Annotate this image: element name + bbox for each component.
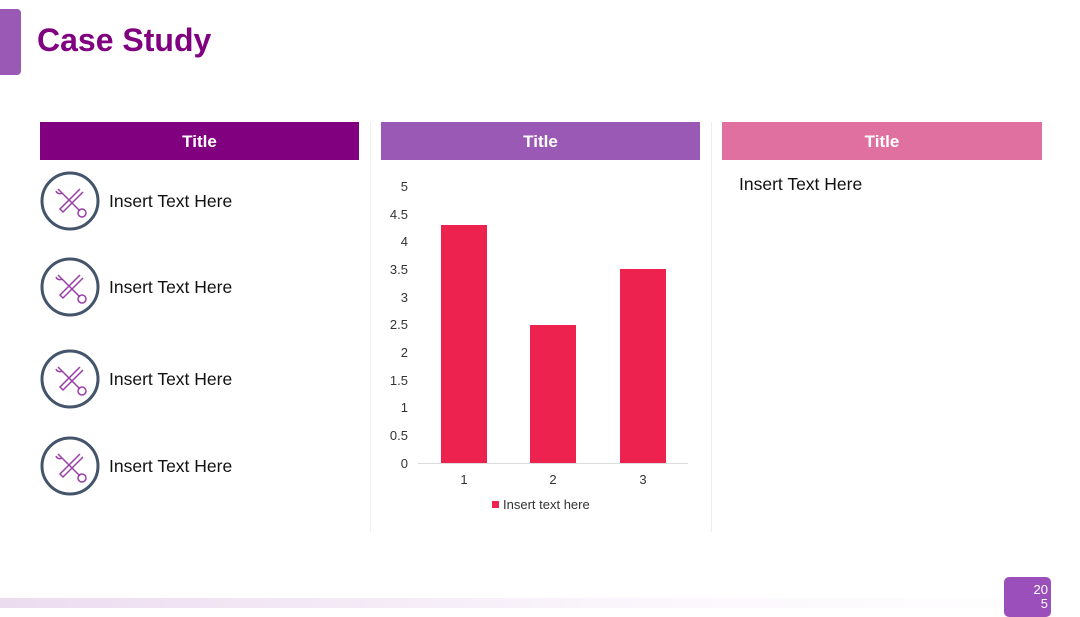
bar chart: 3 bbox=[639, 472, 647, 487]
bar chart: 4.5 bbox=[390, 207, 408, 222]
header: left bbox=[40, 122, 359, 160]
bar chart: 1 bbox=[401, 400, 408, 415]
bar chart: 5 bbox=[401, 179, 408, 194]
bar chart: 3.5 bbox=[390, 262, 408, 277]
header: left: Title bbox=[182, 132, 217, 151]
bar chart: 1 bbox=[460, 472, 468, 487]
list item 1 bbox=[40, 172, 232, 230]
page number bbox=[1004, 577, 1051, 617]
list item 4: Insert Text Here bbox=[109, 456, 232, 476]
header: middle bbox=[381, 122, 700, 160]
icon: tools bbox=[40, 436, 100, 496]
list item 3 bbox=[40, 350, 232, 408]
footer gradient bbox=[0, 598, 1080, 608]
bar chart: 4 bbox=[401, 234, 408, 249]
icon: tools bbox=[40, 258, 100, 316]
list item 2 bbox=[40, 258, 232, 316]
list item 3: Insert Text Here bbox=[109, 369, 232, 389]
list item 2: Insert Text Here bbox=[109, 277, 232, 297]
bar chart: 0.5 bbox=[390, 428, 408, 443]
page number: 5 bbox=[1041, 596, 1048, 611]
bar chart: 3 bbox=[401, 290, 408, 305]
header: right bbox=[722, 122, 1042, 160]
column dividers bbox=[370, 122, 371, 532]
list item 4 bbox=[40, 436, 232, 496]
bar chart: 2 bbox=[401, 345, 408, 360]
legend: Insert text here bbox=[503, 497, 590, 512]
right text block: Insert Text Here bbox=[739, 174, 862, 194]
bar chart: 0 bbox=[401, 456, 408, 471]
header: right: Title bbox=[865, 132, 899, 151]
bar chart: 1.5 bbox=[390, 373, 408, 388]
icon: tools bbox=[40, 350, 100, 408]
page number: 20 bbox=[1034, 582, 1048, 597]
bar chart: 2 bbox=[549, 472, 557, 487]
bar chart: 2.5 bbox=[390, 317, 408, 332]
accent bar bbox=[0, 9, 21, 75]
header: middle: Title bbox=[523, 132, 558, 151]
title: Case Study bbox=[37, 22, 211, 58]
bar chart bbox=[390, 179, 688, 512]
icon: tools bbox=[40, 172, 100, 230]
list item 1: Insert Text Here bbox=[109, 191, 232, 211]
